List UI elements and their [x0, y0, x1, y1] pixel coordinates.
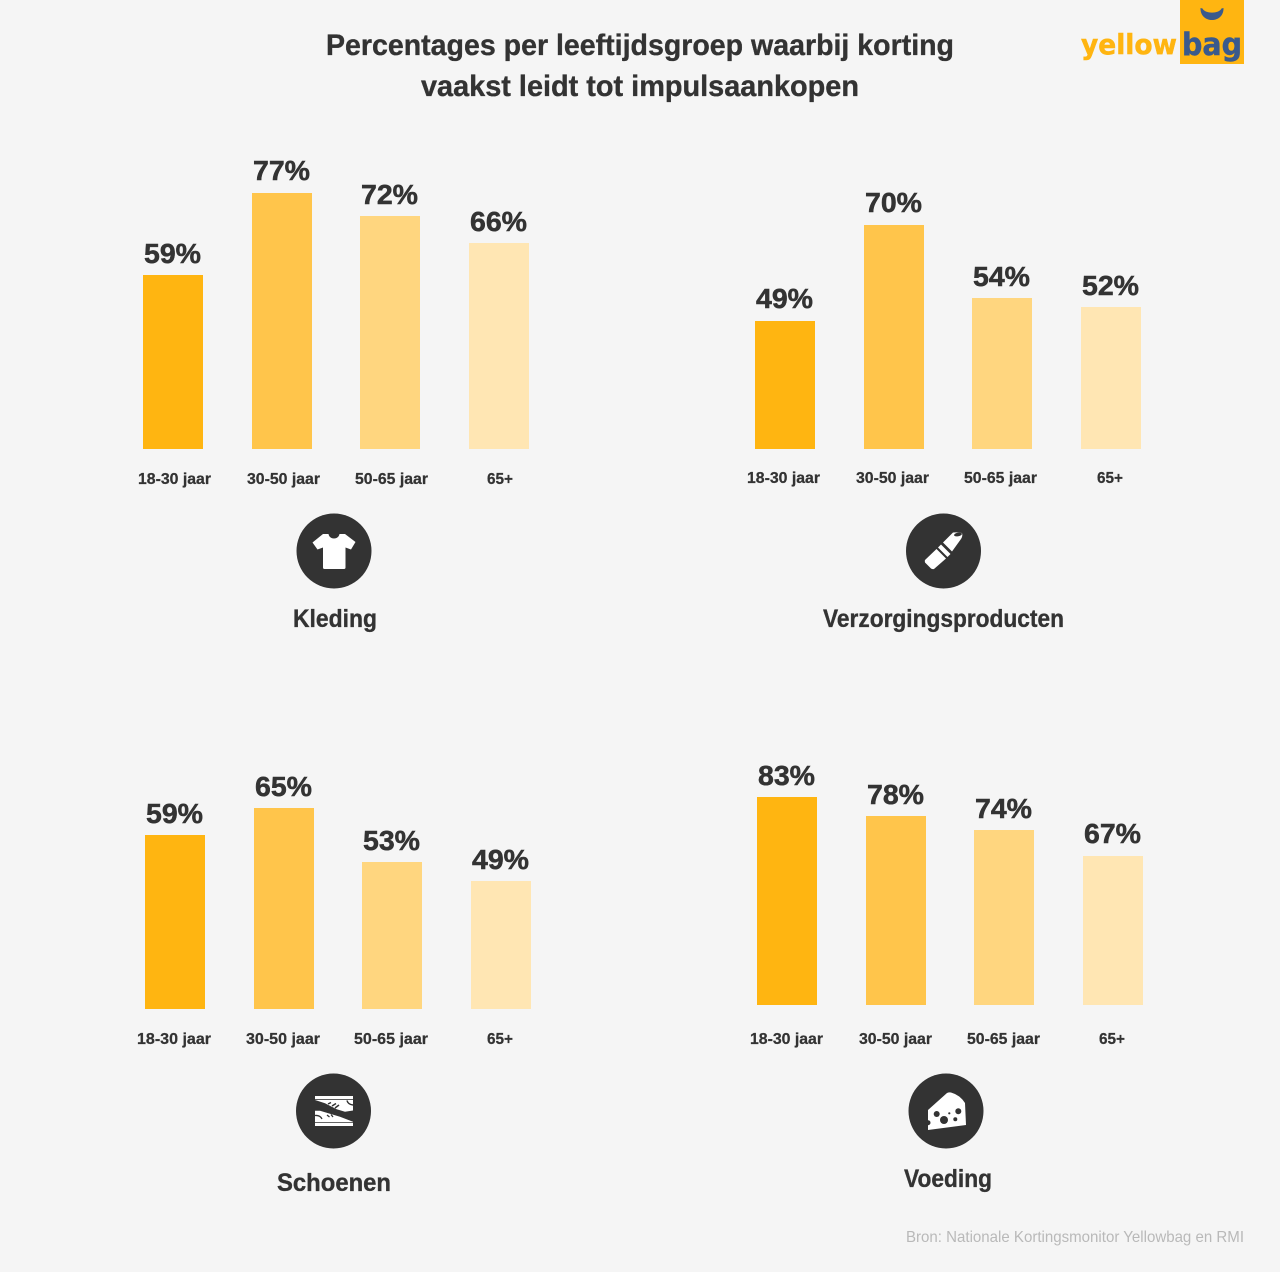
bar chart: Kleding: 50-65 jaar [355, 471, 428, 488]
bar chart: Schoenen: 65% [255, 771, 312, 802]
logo: yellowbag: yellow [1081, 28, 1177, 61]
bar chart: Voeding: 30-50 jaar [859, 1031, 932, 1048]
bar chart: Voeding [750, 760, 1143, 1048]
panel: Voeding [750, 760, 1143, 1193]
bar chart: Schoenen: 53% [363, 825, 420, 856]
bar chart: Verzorgingsproducten: 50-65 jaar [964, 470, 1037, 487]
bar chart: Schoenen: 50-65 jaar [354, 1031, 428, 1048]
label: Kleding: Kleding [293, 605, 377, 633]
bar chart: Voeding: 74% [975, 793, 1032, 824]
bar chart: Verzorgingsproducten: 18-30 jaar [747, 470, 820, 487]
bar chart: Verzorgingsproducten: 65+ [1097, 470, 1123, 487]
icon: t-shirt [296, 514, 372, 588]
bar chart: Verzorgingsproducten: 49% [756, 283, 813, 314]
bar chart: Voeding: 65+ [1099, 1031, 1125, 1048]
bar chart: Kleding: 77% [253, 155, 310, 186]
panel: Verzorgingsproducten [747, 187, 1141, 633]
bar chart: Voeding: 18-30 jaar [750, 1031, 823, 1048]
title: vaakst leidt tot impulsaankopen [421, 70, 859, 103]
title: Percentages per leeftijdsgroep waarbij korting [326, 29, 954, 62]
icon: cheese [908, 1074, 984, 1148]
bar chart: Schoenen: 30-50 jaar [246, 1031, 320, 1048]
icon: lipstick [906, 514, 981, 588]
title [326, 29, 954, 103]
bar chart: Kleding: 66% [470, 206, 527, 237]
bar chart: Schoenen: 18-30 jaar [137, 1031, 211, 1048]
bar chart: Schoenen: 59% [146, 798, 203, 829]
bar chart: Verzorgingsproducten [747, 187, 1141, 487]
bar chart: Voeding: 83% [758, 760, 815, 791]
bar chart: Schoenen [137, 771, 531, 1048]
label: Voeding: Voeding [904, 1165, 992, 1193]
bar chart: Kleding [138, 155, 529, 488]
logo: yellowbag: bag [1182, 27, 1242, 63]
bar chart: Schoenen: 65+ [487, 1031, 513, 1048]
bar chart: Verzorgingsproducten: 70% [865, 187, 922, 218]
bar chart: Verzorgingsproducten: 52% [1082, 270, 1139, 301]
bar chart: Kleding: 59% [144, 238, 201, 269]
panel: Kleding [138, 155, 529, 633]
label: Schoenen: Schoenen [277, 1169, 391, 1197]
icon: shoes [296, 1074, 371, 1148]
bar chart: Verzorgingsproducten: 30-50 jaar [856, 470, 929, 487]
label: Verzorgingsproducten: Verzorgingsproducten [823, 605, 1064, 633]
bar chart: Voeding: 50-65 jaar [967, 1031, 1040, 1048]
source note: Bron: Nationale Kortingsmonitor Yellowbag en RMI [906, 1229, 1244, 1246]
panel: Schoenen [137, 771, 531, 1197]
bar chart: Schoenen: 49% [472, 844, 529, 875]
bar chart: Verzorgingsproducten: 54% [973, 261, 1030, 292]
bar chart: Kleding: 72% [361, 179, 418, 210]
bar chart: Voeding: 78% [867, 779, 924, 810]
bar chart: Kleding: 65+ [487, 471, 513, 488]
bar chart: Voeding: 67% [1084, 818, 1141, 849]
bar chart: Kleding: 30-50 jaar [247, 471, 320, 488]
bar chart: Kleding: 18-30 jaar [138, 471, 211, 488]
logo: yellowbag [1081, 0, 1244, 64]
